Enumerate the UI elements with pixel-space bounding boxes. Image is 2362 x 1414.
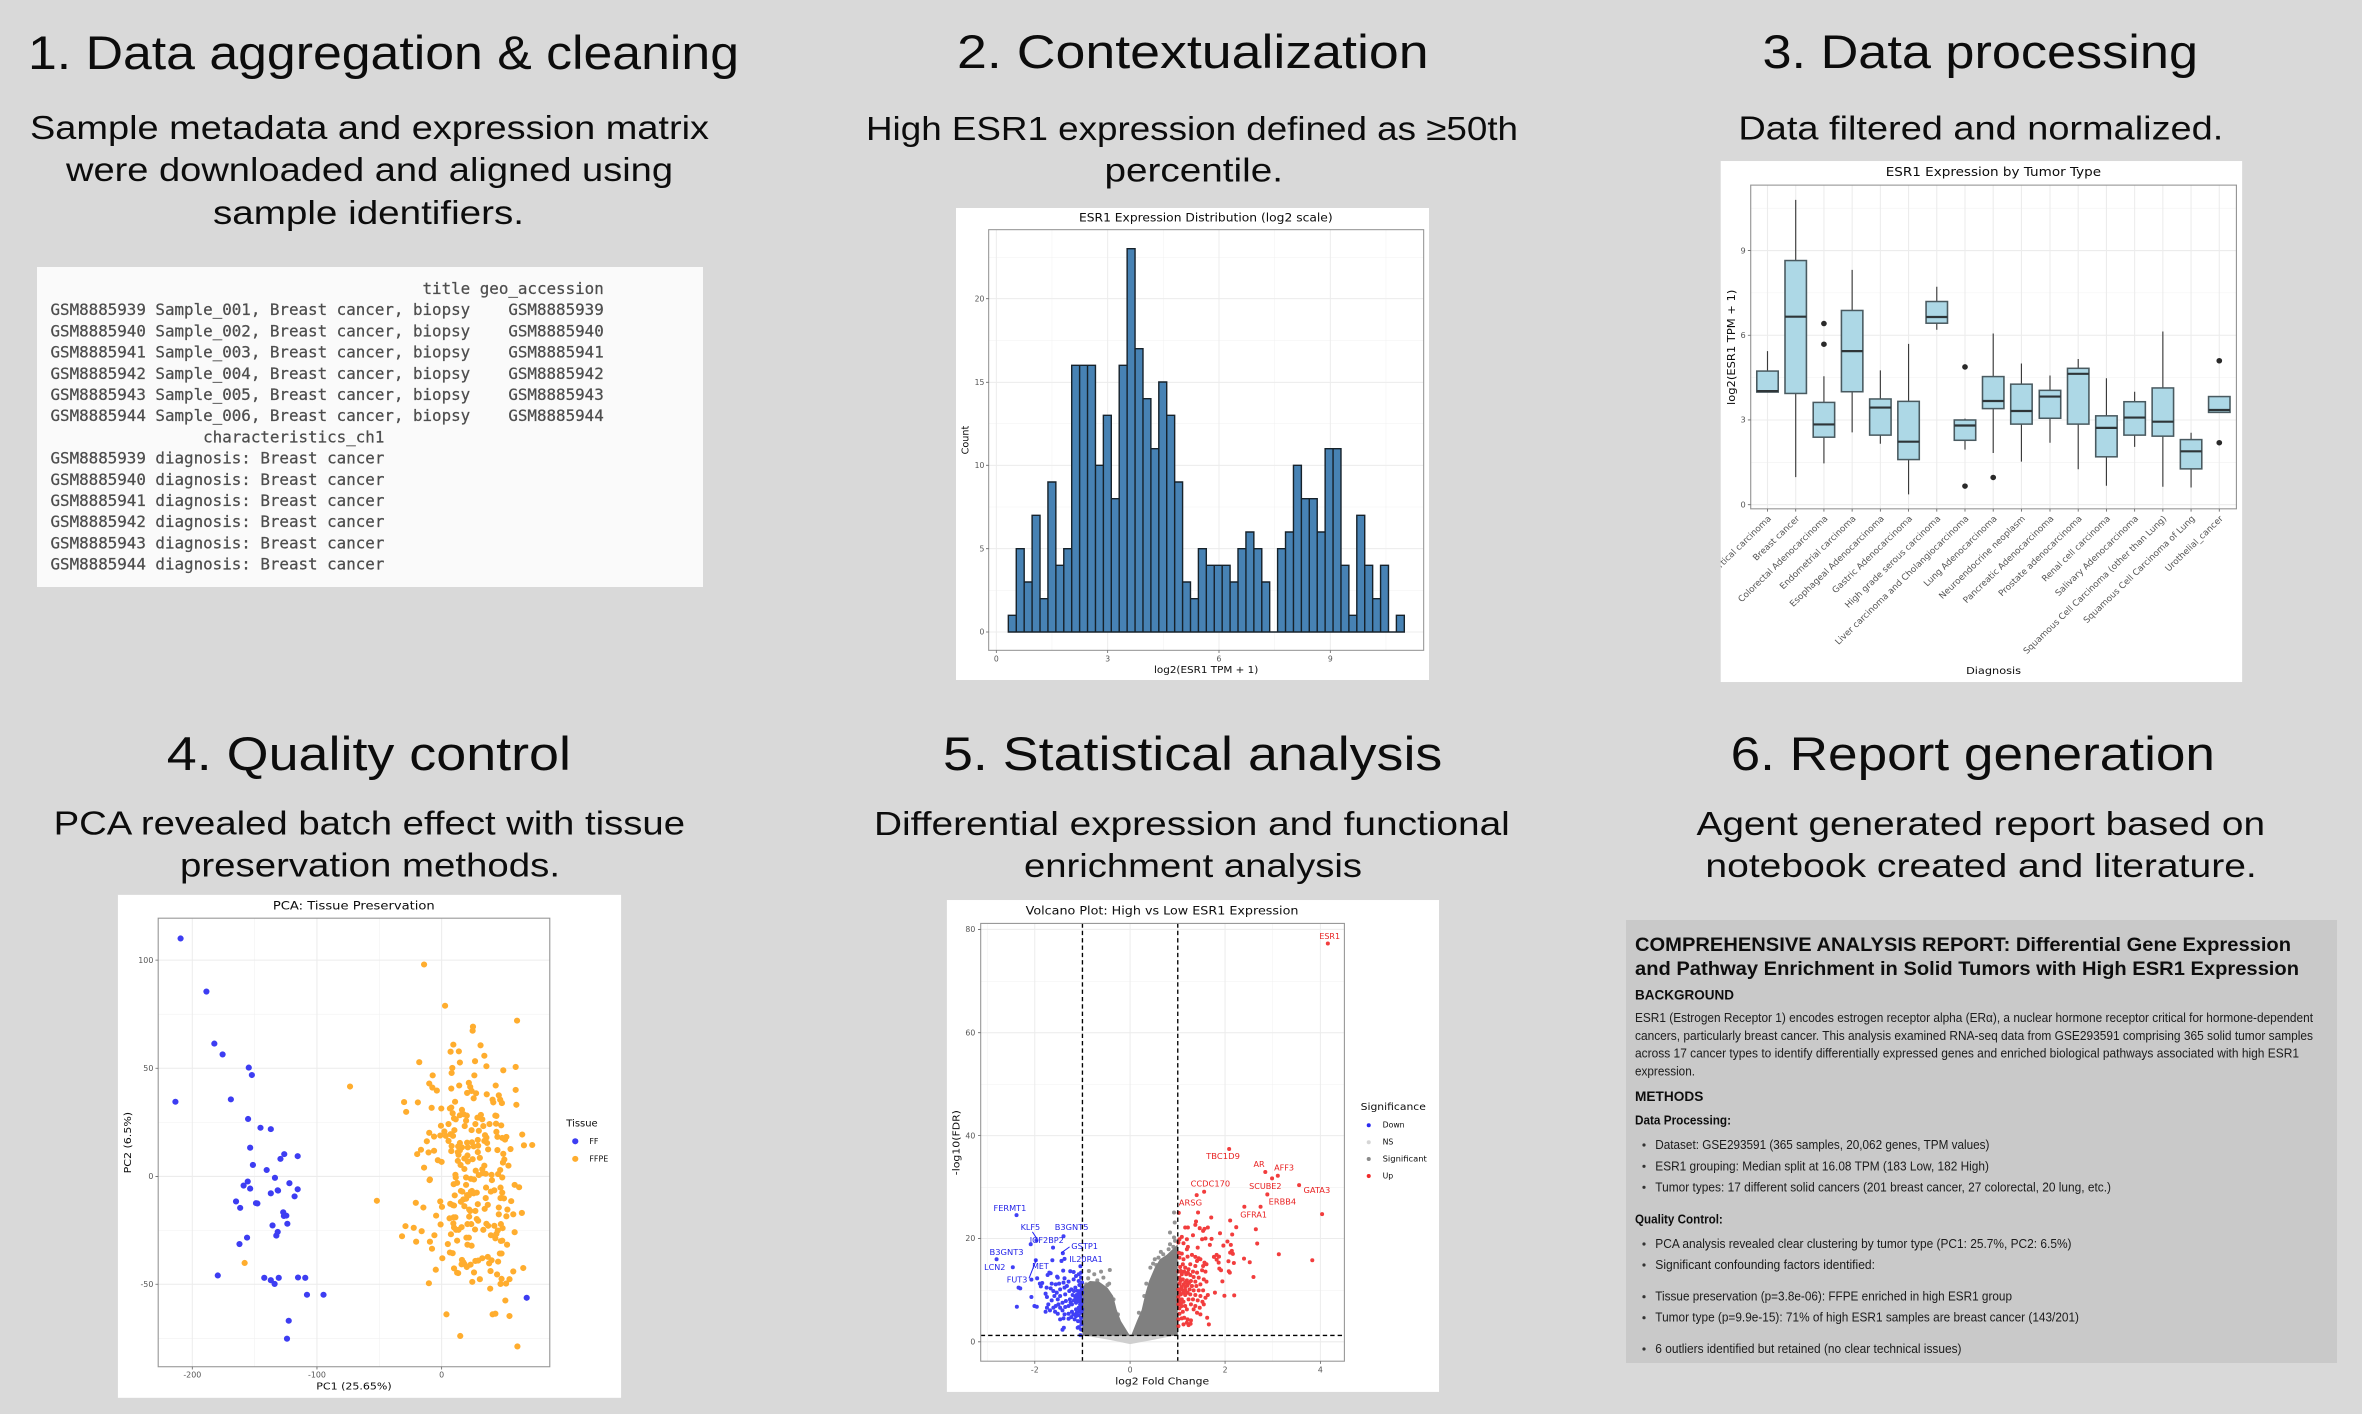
gene labels: down-regulated bbox=[984, 1204, 1103, 1285]
volcano axis labels: 80 bbox=[965, 925, 975, 934]
metadata table: GSM8885944 Sample_006, Breast cancer, biopsy GSM8885944 bbox=[50, 406, 604, 425]
diagnosis category labels: Salivary Adenocarcinoma bbox=[2054, 514, 2141, 599]
box plot title: ESR1 Expression by Tumor Type bbox=[1886, 165, 2101, 179]
gene labels: up-regulated: ERBB4 bbox=[1269, 1198, 1296, 1206]
volcano axis labels: 4 bbox=[1318, 1366, 1323, 1375]
PCA axis labels: -50 bbox=[140, 1280, 153, 1289]
report title: and Pathway Enrichment in Solid Tumors with High ESR1 Expression bbox=[1635, 958, 2299, 980]
box plot axis labels: log2(ESR1 TPM + 1) bbox=[1727, 290, 1738, 405]
metadata table: GSM8885942 Sample_004, Breast cancer, biopsy GSM8885942 bbox=[50, 364, 604, 383]
methods section: Dataset: GSE293591 (365 samples, 20,062 genes, TPM values) bbox=[1655, 1137, 1989, 1152]
metadata table: GSM8885943 diagnosis: Breast cancer bbox=[50, 533, 384, 552]
box bodies bbox=[1757, 261, 2230, 469]
threshold lines bbox=[981, 923, 1344, 1361]
metadata table: GSM8885943 Sample_005, Breast cancer, biopsy GSM8885943 bbox=[50, 385, 604, 404]
PCA axis labels bbox=[123, 956, 444, 1393]
description 5 bbox=[874, 805, 1510, 884]
diagnosis category labels: High grade serous carcinoma bbox=[1843, 514, 1943, 610]
PCA axis labels: 0 bbox=[148, 1172, 153, 1181]
diagnosis category labels: Renal cell carcinoma bbox=[2040, 514, 2113, 584]
FFPE points bbox=[245, 965, 532, 1346]
methods section: ESR1 grouping: Median split at 16.08 TPM (183 Low, 182 High) bbox=[1655, 1158, 1989, 1173]
histogram axis labels: 20 bbox=[975, 294, 984, 303]
diagnosis category labels: Endometrial carcinoma bbox=[1778, 514, 1859, 592]
methods section: Tumor type (p=9.9e-15): 71% of high ESR1 samples are breast cancer (143/201) bbox=[1655, 1310, 2079, 1325]
volcano axis labels: 60 bbox=[965, 1028, 975, 1037]
background section: cancers, particularly breast cancer. This analysis examined RNA-seq data from GSE293591 comprising 365 solid tumor samples bbox=[1635, 1028, 2313, 1043]
metadata table: GSM8885944 diagnosis: Breast cancer bbox=[50, 555, 384, 574]
histogram axis labels: Count bbox=[961, 425, 972, 454]
gene labels: up-regulated: ESR1 bbox=[1319, 932, 1340, 941]
description 2: percentile. bbox=[1104, 152, 1283, 189]
description 2: High ESR1 expression defined as ≥50th bbox=[866, 110, 1518, 147]
significant grey genes bbox=[1082, 1212, 1178, 1336]
description 6: Agent generated report based on bbox=[1696, 805, 2265, 842]
box medians bbox=[1757, 317, 2230, 451]
methods section: 6 outliers identified but retained (no clear technical issues) bbox=[1655, 1341, 1962, 1356]
heading 1: 1. Data aggregation & cleaning bbox=[28, 26, 739, 79]
diagnosis category labels: Prostate adenocarcinoma bbox=[1997, 514, 2085, 599]
gene labels: up-regulated: AR bbox=[1253, 1160, 1265, 1169]
histogram axis labels: 10 bbox=[975, 461, 984, 470]
PCA legend: Tissue bbox=[565, 1118, 598, 1129]
volcano axis labels: 0 bbox=[1128, 1366, 1133, 1375]
gene labels: down-regulated: B3GNT3 bbox=[989, 1248, 1024, 1257]
volcano legend: Up bbox=[1383, 1171, 1393, 1180]
histogram axis labels: 6 bbox=[1217, 654, 1222, 663]
background section: BACKGROUND bbox=[1635, 986, 1734, 1002]
PCA legend bbox=[565, 1118, 608, 1164]
PCA axis labels: 100 bbox=[138, 956, 153, 965]
volcano axis labels: 40 bbox=[965, 1131, 975, 1140]
methods section: METHODS bbox=[1635, 1088, 1703, 1104]
diagnosis category labels: Urothelial_cancer bbox=[2164, 514, 2226, 574]
diagnosis category labels: Pancreatic Adenocarcinoma bbox=[1962, 514, 2056, 606]
gene labels: up-regulated: GATA3 bbox=[1304, 1186, 1330, 1195]
volcano legend: Significance bbox=[1361, 1102, 1426, 1113]
metadata table: GSM8885941 diagnosis: Breast cancer bbox=[50, 491, 384, 510]
metadata table bbox=[37, 267, 703, 587]
volcano legend: NS bbox=[1383, 1138, 1393, 1147]
PCA axis labels: 50 bbox=[143, 1064, 153, 1073]
report title bbox=[1635, 934, 2299, 980]
volcano axis labels bbox=[952, 925, 1323, 1388]
PCA axis labels: 0 bbox=[439, 1371, 444, 1380]
panel 5: statistical analysis bbox=[874, 727, 1510, 1392]
histogram axis labels: 0 bbox=[994, 654, 999, 663]
description 1 bbox=[30, 109, 710, 231]
gene labels: down-regulated: IL20RA1 bbox=[1069, 1255, 1103, 1264]
histogram axis labels: 5 bbox=[979, 544, 984, 553]
box plot axis labels: 9 bbox=[1740, 246, 1746, 255]
diagnosis category labels: Breast cancer bbox=[1751, 514, 1802, 563]
background section: expression. bbox=[1635, 1064, 1695, 1079]
panel 4: quality control bbox=[54, 727, 685, 1398]
methods section: Data Processing: bbox=[1635, 1112, 1731, 1127]
diagnosis category labels: Liver carcinoma and Cholangiocarcinoma bbox=[1834, 514, 1971, 647]
description 5: enrichment analysis bbox=[1024, 847, 1362, 884]
diagnosis category labels: Gastric Adenocarcinoma bbox=[1831, 514, 1915, 596]
diagnosis category labels: Lung Adenocarcinoma bbox=[1922, 514, 2000, 589]
volcano axis labels: -log10(FDR) bbox=[952, 1110, 963, 1175]
diagnosis category labels: Adrenocortical carcinoma bbox=[1686, 514, 1774, 599]
box plot axis labels: 6 bbox=[1740, 331, 1746, 340]
methods section: PCA analysis revealed clear clustering by tumor type (PC1: 25.7%, PC2: 6.5%) bbox=[1655, 1236, 2072, 1251]
heading 2: 2. Contextualization bbox=[957, 25, 1429, 78]
background section: across 17 cancer types to identify differentially expressed genes and enriched biological pathways associated with high ESR1 bbox=[1635, 1046, 2299, 1061]
gene labels: up-regulated: CCDC170 bbox=[1191, 1180, 1230, 1189]
PCA scatter chart bbox=[118, 895, 621, 1398]
gene labels: down-regulated: GSTP1 bbox=[1071, 1242, 1098, 1251]
gene labels: up-regulated bbox=[1179, 932, 1340, 1219]
box outliers bbox=[1824, 324, 2219, 486]
background section: ESR1 (Estrogen Receptor 1) encodes estrogen receptor alpha (ERα), a nuclear hormone receptor critical for hormone-dependent bbox=[1635, 1010, 2313, 1025]
histogram chart bbox=[956, 208, 1429, 680]
diagnosis category labels: Squamous Cell Carcinoma of Lung bbox=[2082, 514, 2198, 626]
metadata table: GSM8885939 diagnosis: Breast cancer bbox=[50, 449, 384, 468]
methods section: Tissue preservation (p=3.8e-06): FFPE enriched in high ESR1 group bbox=[1655, 1289, 2012, 1304]
heading 6: 6. Report generation bbox=[1731, 727, 2215, 780]
histogram title: ESR1 Expression Distribution (log2 scale) bbox=[1079, 210, 1333, 224]
gene labels: up-regulated: ARSG bbox=[1179, 1199, 1202, 1207]
methods section bbox=[1635, 1088, 2111, 1356]
description 4: PCA revealed batch effect with tissue bbox=[54, 805, 685, 842]
PCA legend: FFPE bbox=[589, 1155, 608, 1164]
gene labels: down-regulated: MET bbox=[1032, 1262, 1049, 1271]
volcano legend: Significant bbox=[1383, 1154, 1427, 1163]
FF points bbox=[175, 938, 527, 1339]
volcano axis labels: log2 Fold Change bbox=[1115, 1377, 1209, 1388]
down-regulated genes bbox=[997, 1215, 1082, 1335]
generated report excerpt bbox=[1626, 920, 2337, 1363]
metadata table: GSM8885942 diagnosis: Breast cancer bbox=[50, 512, 384, 531]
description 5: Differential expression and functional bbox=[874, 805, 1510, 842]
volcano axis labels: -2 bbox=[1031, 1366, 1039, 1375]
histogram axis labels: 9 bbox=[1328, 654, 1333, 663]
gene labels: up-regulated: AFF3 bbox=[1274, 1164, 1294, 1173]
PCA axis labels: -100 bbox=[308, 1371, 326, 1380]
gene labels: down-regulated: IGF2BP2 bbox=[1030, 1236, 1064, 1245]
panel 3: data processing bbox=[1686, 25, 2242, 682]
histogram axis labels bbox=[961, 294, 1333, 676]
volcano legend: Down bbox=[1383, 1121, 1405, 1130]
box plot axis labels: 0 bbox=[1740, 501, 1746, 509]
box plot axis labels: Diagnosis bbox=[1966, 666, 2021, 677]
volcano title: Volcano Plot: High vs Low ESR1 Expression bbox=[1026, 904, 1298, 918]
diagnosis category labels: Esophageal Adenocarcinoma bbox=[1788, 514, 1887, 609]
report title: COMPREHENSIVE ANALYSIS REPORT: Differential Gene Expression bbox=[1635, 934, 2291, 956]
gene labels: down-regulated: KLF5 bbox=[1021, 1223, 1040, 1232]
PCA axis labels: PC1 (25.65%) bbox=[316, 1382, 392, 1393]
description 4 bbox=[54, 805, 685, 884]
box plot axis labels: 3 bbox=[1740, 416, 1746, 425]
description 6: notebook created and literature. bbox=[1705, 847, 2257, 884]
gene labels: up-regulated: SCUBE2 bbox=[1249, 1182, 1282, 1191]
histogram axis labels: 15 bbox=[975, 378, 984, 387]
heading 4: 4. Quality control bbox=[167, 727, 571, 780]
volcano plot chart bbox=[947, 900, 1439, 1392]
up-regulated genes bbox=[1178, 943, 1328, 1326]
panel 2: contextualization bbox=[866, 25, 1518, 680]
PCA axis labels: -200 bbox=[183, 1371, 201, 1380]
diagnosis category labels: Colorectal Adenocarcinoma bbox=[1737, 514, 1830, 605]
histogram axis labels: 0 bbox=[979, 628, 984, 637]
heading 5: 5. Statistical analysis bbox=[943, 727, 1442, 780]
description 1: were downloaded and aligned using bbox=[65, 151, 673, 188]
panel 1: data aggregation and cleaning bbox=[28, 26, 739, 587]
histogram axis labels: 3 bbox=[1105, 654, 1110, 663]
metadata table: GSM8885941 Sample_003, Breast cancer, biopsy GSM8885941 bbox=[50, 343, 604, 362]
volcano legend bbox=[1361, 1102, 1427, 1180]
metadata table: characteristics_ch1 bbox=[50, 427, 384, 446]
volcano axis labels: 0 bbox=[970, 1338, 975, 1346]
volcano axis labels: 2 bbox=[1223, 1366, 1228, 1375]
box whiskers bbox=[1767, 200, 2191, 494]
heading 3: 3. Data processing bbox=[1762, 25, 2198, 78]
gene labels: down-regulated: LCN2 bbox=[984, 1263, 1005, 1272]
volcano axis labels: 20 bbox=[965, 1234, 975, 1243]
metadata table: GSM8885940 diagnosis: Breast cancer bbox=[50, 470, 384, 489]
gene labels: up-regulated: GFRA1 bbox=[1240, 1211, 1267, 1219]
PCA legend: FF bbox=[589, 1137, 599, 1146]
box plot axis labels bbox=[1727, 246, 2021, 677]
gene labels: down-regulated: B3GNT5 bbox=[1055, 1223, 1089, 1232]
gene labels: up-regulated: TBC1D9 bbox=[1205, 1152, 1240, 1161]
description 4: preservation methods. bbox=[180, 847, 560, 884]
panel 6: report generation bbox=[1626, 727, 2337, 1363]
box plot chart bbox=[1686, 161, 2242, 682]
histogram bars bbox=[1008, 249, 1404, 632]
gene labels: down-regulated: FERMT1 bbox=[994, 1204, 1026, 1213]
description 3: Data filtered and normalized. bbox=[1738, 110, 2223, 146]
PCA title: PCA: Tissue Preservation bbox=[273, 899, 435, 913]
metadata table: title geo_accession bbox=[50, 279, 604, 298]
description 2 bbox=[866, 110, 1518, 189]
diagnosis category labels bbox=[1686, 514, 2226, 657]
metadata table: GSM8885940 Sample_002, Breast cancer, biopsy GSM8885940 bbox=[50, 321, 604, 340]
histogram axis labels: log2(ESR1 TPM + 1) bbox=[1154, 665, 1258, 676]
non-significant genes bbox=[1084, 1335, 1175, 1344]
methods section: Quality Control: bbox=[1635, 1211, 1723, 1226]
PCA axis labels: PC2 (6.5%) bbox=[123, 1112, 134, 1173]
methods section: Significant confounding factors identified: bbox=[1655, 1257, 1875, 1272]
description 6 bbox=[1696, 805, 2265, 884]
gene labels: down-regulated: FUT3 bbox=[1007, 1276, 1027, 1285]
methods section: Tumor types: 17 different solid cancers (201 breast cancer, 27 colorectal, 20 lung, etc.) bbox=[1655, 1179, 2111, 1194]
description 1: sample identifiers. bbox=[213, 194, 524, 231]
description 1: Sample metadata and expression matrix bbox=[30, 109, 710, 146]
diagnosis category labels: Neuroendocrine neoplasm bbox=[1937, 514, 2028, 601]
background section bbox=[1635, 986, 2313, 1079]
diagnosis category labels: Squamous Cell Carcinoma (other than Lung) bbox=[2022, 514, 2169, 657]
metadata table: GSM8885939 Sample_001, Breast cancer, biopsy GSM8885939 bbox=[50, 300, 604, 319]
